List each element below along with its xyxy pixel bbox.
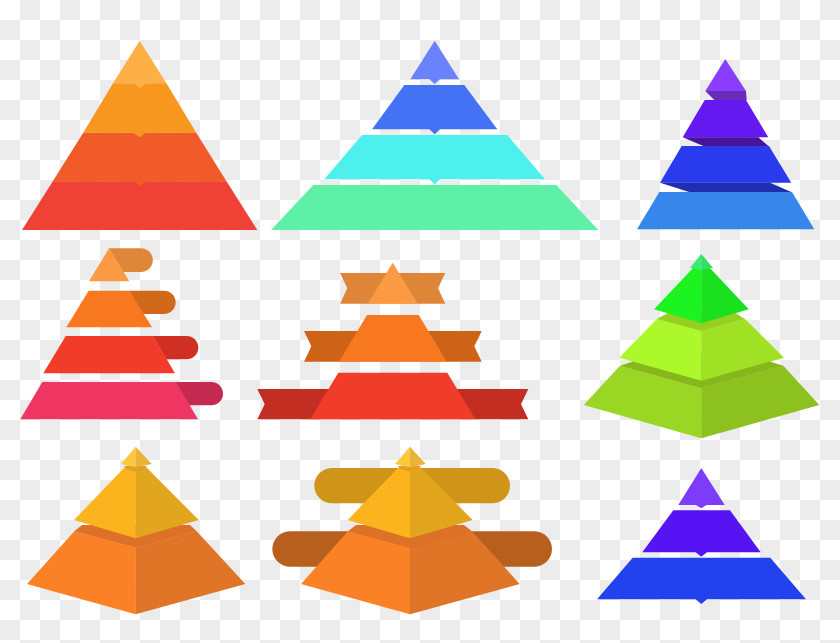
pyramid 9: violet-blue separated tiers: [597, 468, 806, 604]
base left face: [584, 366, 701, 438]
tier 2: [660, 146, 791, 183]
base right face: [410, 531, 520, 614]
pyramid 7: orange-yellow 3D pyramid: [27, 447, 245, 614]
pyramid 6: green 3D pyramid: [584, 254, 819, 438]
base left face: [301, 531, 410, 614]
tier 3: [66, 291, 152, 327]
lower pill: [272, 531, 552, 567]
pyramid 5: tiers with ribbons on both sides: [257, 263, 528, 419]
tab 2: [153, 336, 198, 359]
middle right face: [136, 468, 199, 538]
pyramid 2: blue-green separated tiers: [271, 41, 598, 230]
tier 4 top: [113, 41, 166, 88]
cap left face: [395, 447, 410, 467]
tier 1: [310, 373, 475, 419]
tier 1: [637, 192, 814, 229]
fold 1: [660, 183, 791, 192]
base right face: [136, 531, 245, 614]
tier 3: [372, 85, 497, 134]
tier 4 top: [89, 248, 129, 281]
cap left face: [690, 254, 701, 270]
tier 2: [339, 315, 447, 362]
cap left face: [121, 447, 136, 467]
tier 2: [324, 135, 545, 184]
middle left face: [74, 468, 136, 538]
fold 3: [705, 91, 747, 100]
middle right face: [410, 468, 473, 538]
cap right face: [701, 254, 713, 270]
tier 2: [53, 133, 226, 186]
cap right face: [410, 447, 426, 467]
ribbon 2: [304, 331, 482, 362]
upper left face: [654, 267, 701, 323]
ribbon 1: [257, 389, 528, 419]
ribbon 3: [340, 273, 445, 304]
pyramid 3: purple-blue folded tiers: [637, 59, 814, 229]
tier 3: [83, 83, 196, 138]
pyramid 1: orange-red stacked triangle: [22, 41, 257, 230]
tab 1: [176, 382, 223, 405]
tier 3: [683, 100, 768, 137]
tier 2: [43, 336, 175, 373]
tier 1: [597, 558, 806, 604]
base right face: [701, 366, 819, 438]
middle shadow band: [657, 313, 745, 331]
tab 3: [129, 291, 176, 314]
upper pill: [314, 468, 510, 503]
middle right face: [701, 319, 784, 381]
tier 1: [271, 185, 598, 230]
tier 3 top: [678, 468, 725, 508]
base shadow band: [620, 353, 783, 388]
tier 3 top: [368, 263, 418, 304]
pyramid 8: orange-yellow 3D pyramid with pills: [272, 447, 552, 614]
middle left face: [348, 468, 410, 538]
tier 2: [642, 510, 761, 557]
base shadow band: [348, 525, 472, 548]
fold 2: [683, 137, 768, 146]
tier 1: [22, 181, 257, 230]
tier 4 top: [705, 59, 746, 91]
cap shadow: [124, 466, 147, 472]
tier 4 top: [410, 41, 459, 84]
middle left face: [619, 319, 701, 381]
tier 1: [20, 382, 198, 419]
cap right face: [136, 447, 152, 467]
tab 4: [109, 248, 153, 272]
base shadow band: [74, 525, 197, 548]
cap shadow: [398, 466, 421, 472]
upper right face: [701, 267, 749, 323]
base left face: [27, 531, 136, 614]
pyramid 4: tiers with rounded tabs to the right: [20, 248, 223, 419]
